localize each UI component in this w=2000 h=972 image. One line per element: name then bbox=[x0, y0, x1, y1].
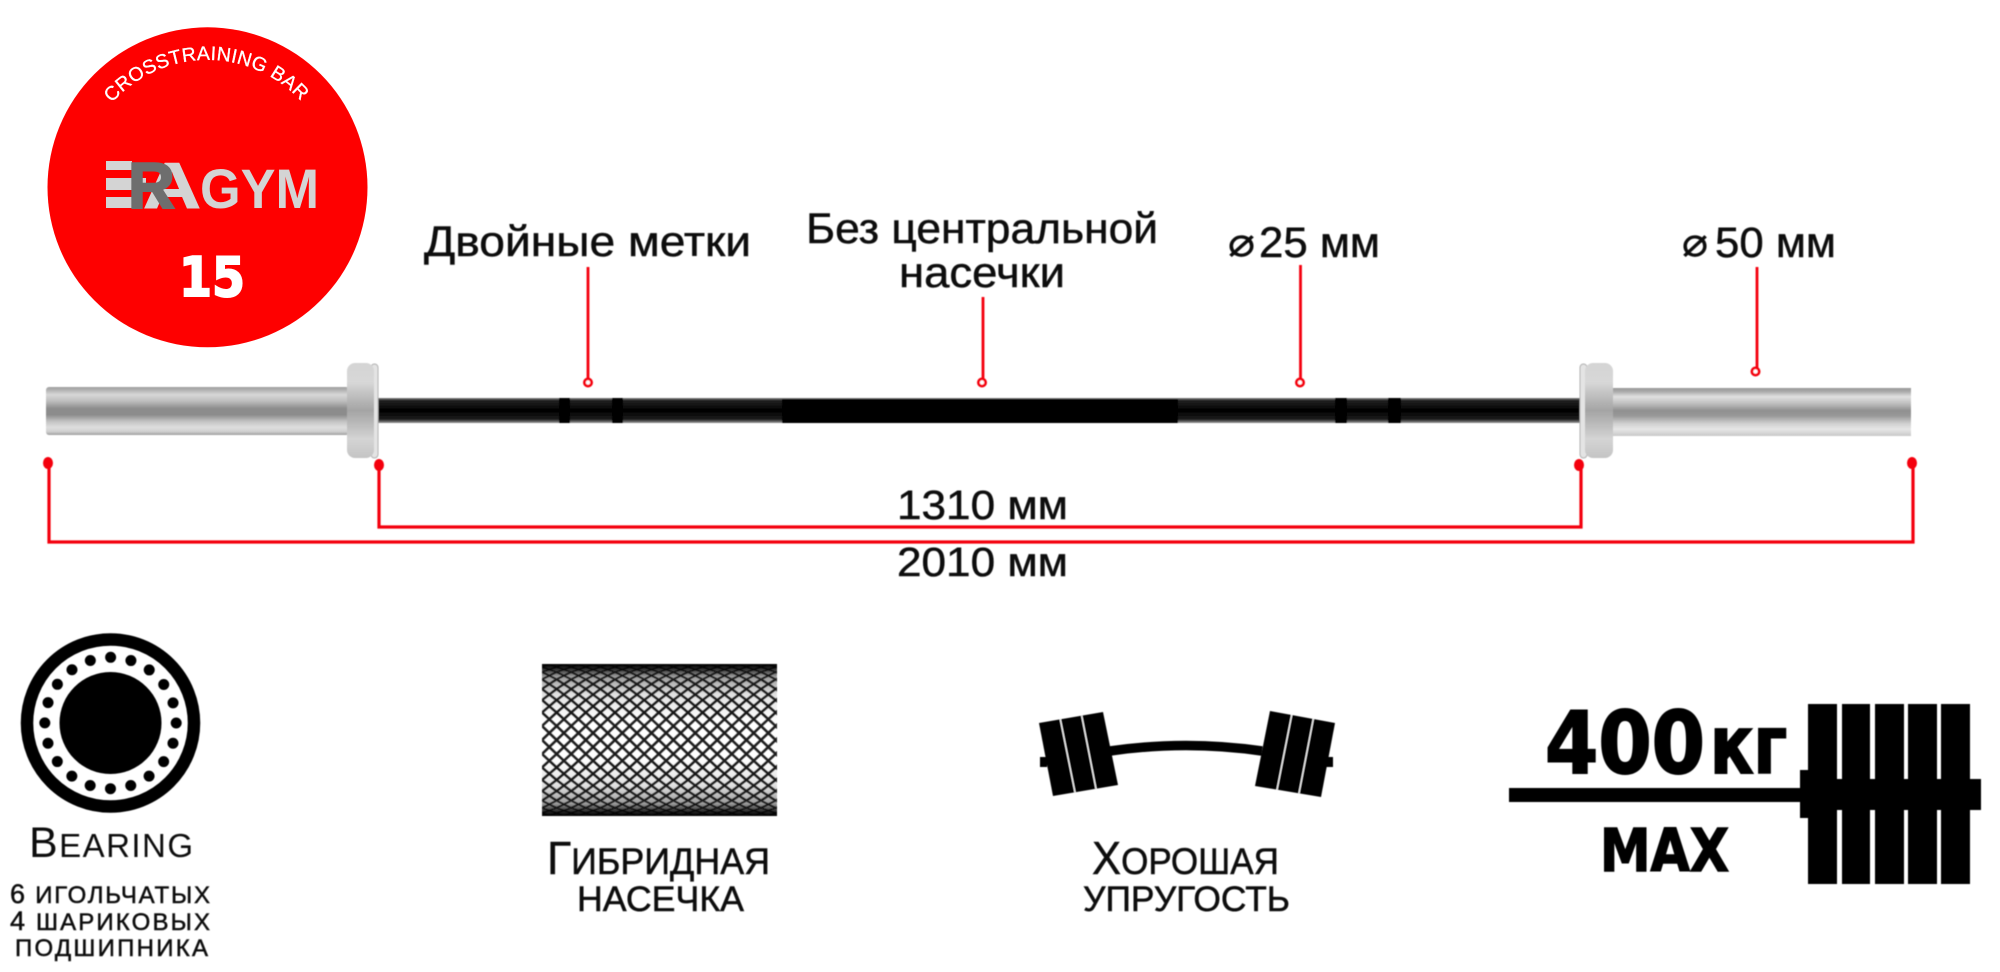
left collar bbox=[347, 363, 378, 458]
feature: hybrid knurl bbox=[542, 664, 777, 919]
icon: knurl mesh bbox=[542, 664, 777, 816]
red circle bbox=[48, 27, 368, 347]
label: good elasticity: УПРУГОСТЬ bbox=[1083, 880, 1290, 919]
icon: bent barbell bbox=[1039, 711, 1335, 797]
bearing details: 4 ШАРИКОВЫХ bbox=[10, 906, 210, 936]
label: double marks: Двойные метки bbox=[424, 218, 751, 266]
callout: no center knurl bbox=[978, 297, 986, 386]
logo badge bbox=[48, 27, 368, 348]
feature: 400 kg max bbox=[1509, 694, 1981, 885]
icon: bearing bbox=[27, 640, 194, 806]
dimension line: 2010 mm bbox=[43, 457, 1917, 542]
icon: loaded barbell bbox=[1509, 704, 1981, 884]
heading: bearing: BEARING bbox=[29, 819, 193, 867]
barbell diagram bbox=[46, 363, 1911, 458]
label: hybrid knurl bbox=[547, 832, 770, 919]
callout: 25 mm bbox=[1296, 265, 1304, 386]
label: diameter 50 mm: 50 мм bbox=[1715, 219, 1836, 267]
curved label: crosstraining bar: CROSSTRAINING BAR bbox=[105, 46, 308, 101]
label: no center knurl: Без центральной bbox=[806, 205, 1158, 253]
central smooth section bbox=[782, 399, 1178, 423]
bearing details bbox=[10, 879, 210, 962]
label: 1310 mm: 1310 мм bbox=[897, 482, 1068, 528]
logo: eragym: GYM bbox=[200, 157, 319, 220]
feature: bearing bbox=[10, 640, 210, 962]
label: diameter 25 mm: 25 мм bbox=[1259, 219, 1380, 267]
label: good elasticity bbox=[1083, 832, 1290, 919]
label: no center knurl bbox=[806, 205, 1158, 297]
number 15: 15 bbox=[179, 246, 245, 309]
callout: 50 mm bbox=[1752, 267, 1759, 375]
logo: eragym: A bbox=[143, 149, 201, 222]
logo: eragym: R bbox=[128, 149, 175, 222]
right collar bbox=[1580, 363, 1613, 458]
label: hybrid knurl: ГИБРИДНАЯ bbox=[547, 832, 770, 884]
feature: good elasticity bbox=[1039, 711, 1335, 919]
label: diameter 25 mm: ⌀ bbox=[1228, 220, 1255, 266]
red callouts bbox=[43, 265, 1917, 542]
label: no center knurl: насечки bbox=[899, 249, 1065, 297]
top labels bbox=[424, 205, 1836, 585]
label: 2010 mm: 2010 мм bbox=[897, 539, 1068, 585]
bearing details: ПОДШИПНИКА bbox=[15, 935, 208, 962]
right sleeve bbox=[1611, 388, 1911, 436]
bearing details: 6 ИГОЛЬЧАТЫХ bbox=[10, 879, 210, 909]
double marks right bbox=[1335, 398, 1401, 423]
callout: double marks bbox=[584, 267, 592, 386]
logo: eragym bbox=[106, 149, 319, 222]
double marks left bbox=[559, 398, 623, 423]
label: hybrid knurl: НАСЕЧКА bbox=[577, 880, 745, 919]
shaft bbox=[373, 398, 1587, 423]
value: 400 kg: 400 bbox=[1545, 694, 1705, 794]
dimension line: 1310 mm bbox=[374, 459, 1584, 527]
label: diameter 50 mm: ⌀ bbox=[1682, 220, 1708, 266]
value: 400 kg: кг bbox=[1710, 699, 1787, 792]
label: good elasticity: ХОРОШАЯ bbox=[1092, 832, 1279, 884]
left sleeve bbox=[46, 387, 349, 435]
label: max: МАХ bbox=[1600, 816, 1729, 885]
